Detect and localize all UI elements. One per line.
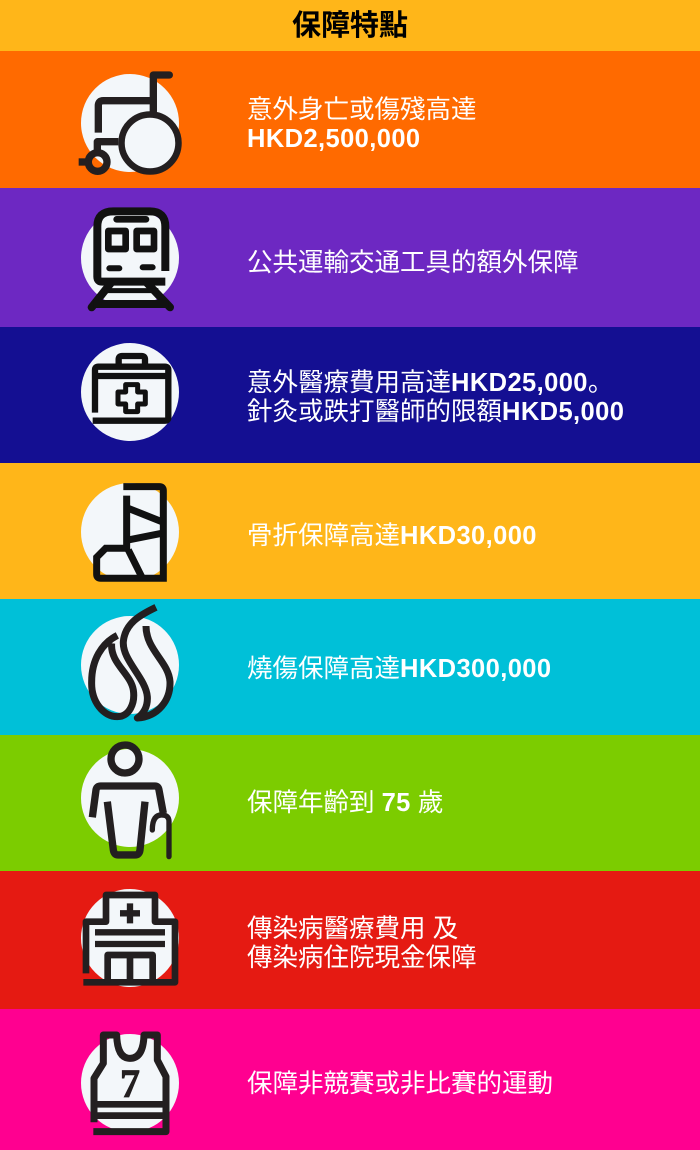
jersey number: 7 [120,1061,140,1106]
icon: medical kit [81,343,179,441]
icon: sports jersey [81,1034,179,1132]
text: medical expenses: 針灸或跌打醫師的限額HKD5,000 [247,398,624,426]
icon: flames [81,607,179,718]
panel: sports [0,1009,700,1150]
text: public transport: 公共運輸交通工具的額外保障 [247,249,579,277]
panel: infectious disease [0,871,700,1009]
text: age: 保障年齡到 75 歲 [247,789,443,817]
panel: accidental death [0,51,700,188]
panel: medical expenses [0,327,700,463]
text: infectious disease [247,915,477,972]
icon: broken leg cast [81,483,179,581]
icon: elderly person with cane [81,745,179,857]
icon: wheelchair [79,74,179,172]
icon: hospital [81,889,179,987]
title: 保障特點 [292,10,408,42]
text: sports: 保障非競賽或非比賽的運動 [247,1070,553,1098]
panel: age [0,735,700,871]
text: medical expenses [247,369,624,426]
panel: public transport [0,188,700,327]
text: infectious disease: 傳染病醫療費用 及 [247,915,458,943]
text: burns: 燒傷保障高達HKD300,000 [247,655,551,683]
text: accidental death [247,96,477,153]
text: medical expenses: 意外醫療費用高達HKD25,000。 [247,369,613,397]
text: accidental death: 意外身亡或傷殘高達 [247,96,477,124]
panel: fracture [0,463,700,599]
text: fracture: 骨折保障高達HKD30,000 [247,522,537,550]
text: accidental death: HKD2,500,000 [247,125,420,153]
icon: train [81,209,179,307]
text: infectious disease: 傳染病住院現金保障 [247,944,477,972]
title band [0,0,700,51]
panel: burns [0,599,700,735]
